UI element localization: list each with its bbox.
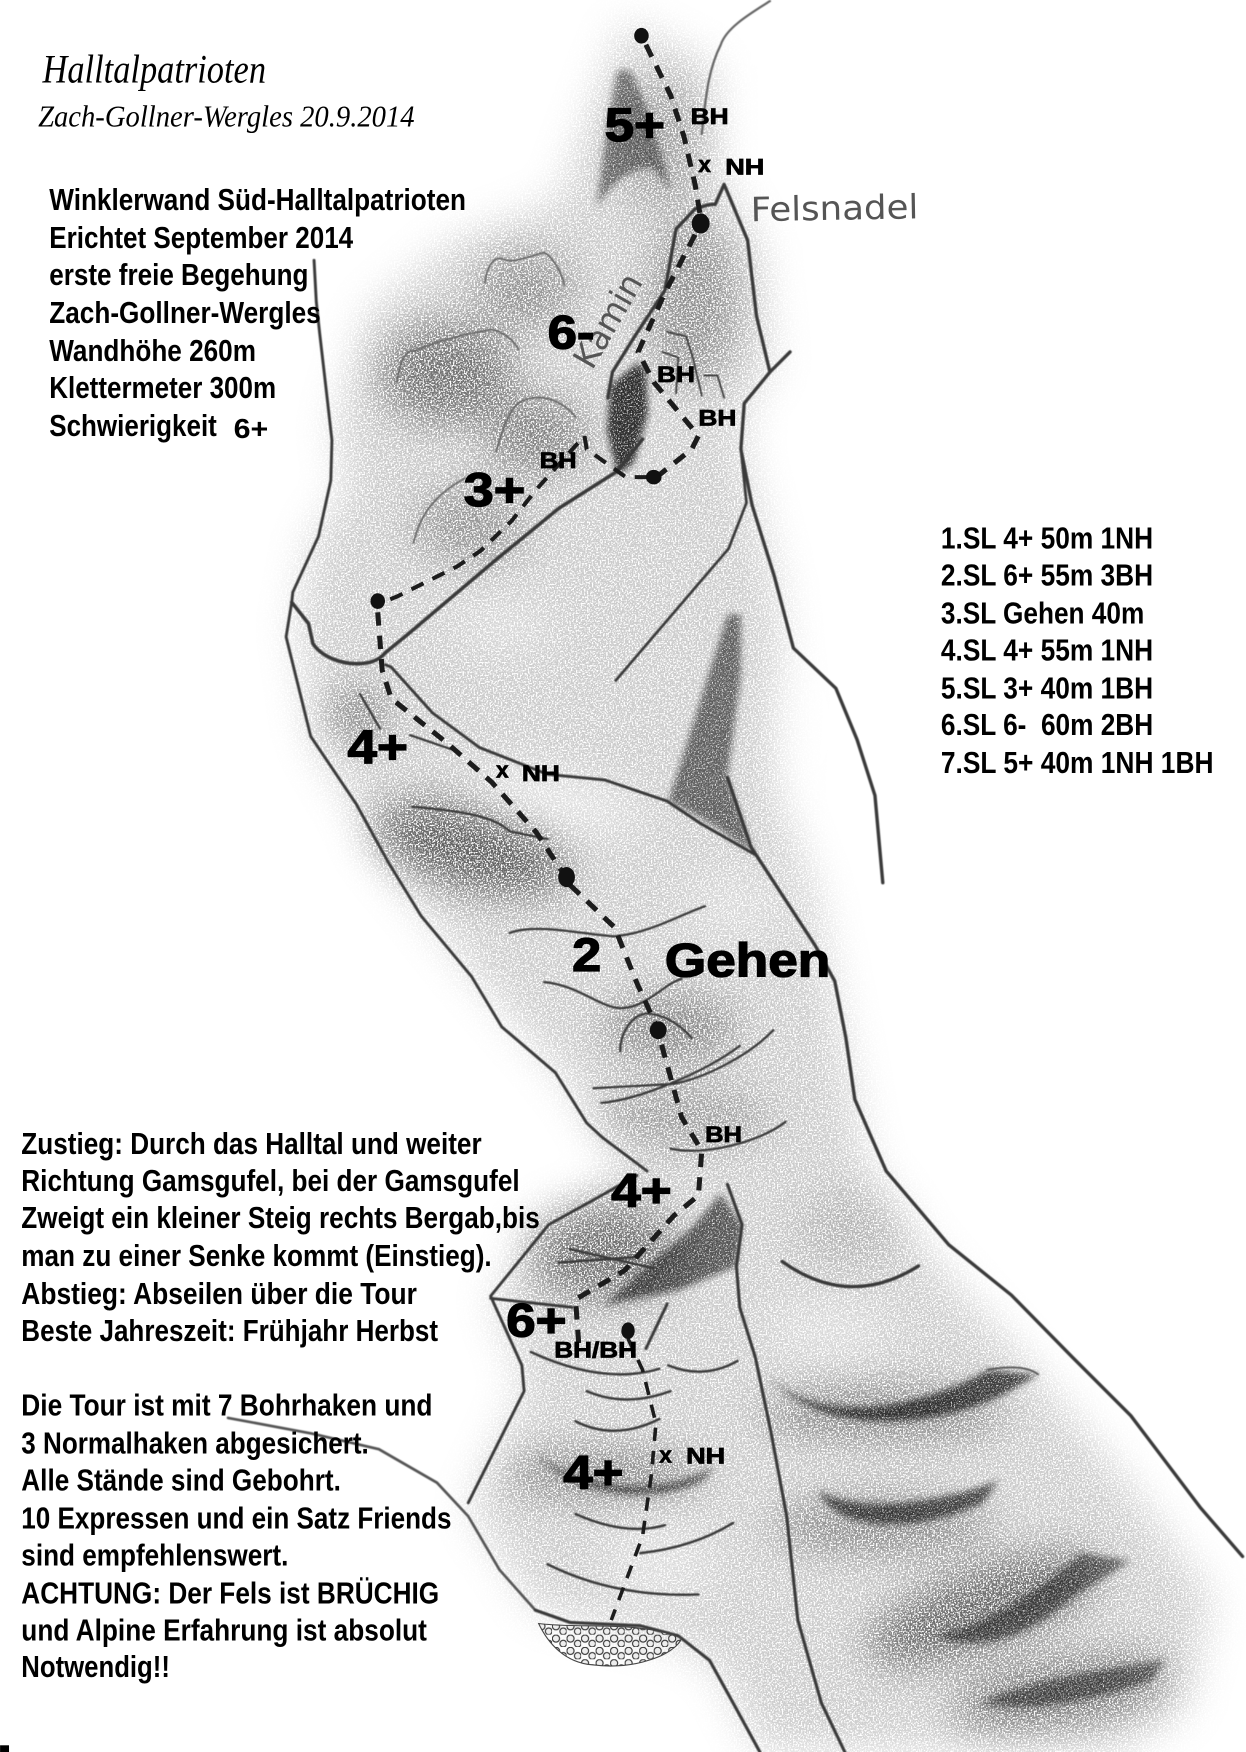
outline: lower spike edge <box>727 1184 845 1752</box>
panel: approach and notes: man zu einer Senke kommt (Einstieg). <box>21 1240 492 1273</box>
outline: diagonal traverse line <box>386 665 755 855</box>
panel: pitch list: 5.SL 3+ 40m 1BH <box>941 672 1153 705</box>
grade 4+ upper: 4+ <box>348 721 408 773</box>
panel: route facts: erste freie Begehung <box>49 259 308 292</box>
climbing route <box>370 28 710 1620</box>
bolt BH top: BH <box>691 104 729 129</box>
panel: approach and notes: Alle Stände sind Gebohrt. <box>21 1465 341 1498</box>
piton top: x <box>698 152 711 177</box>
panel: approach and notes: ACHTUNG: Der Fels ist BRÜCHIG <box>21 1577 439 1610</box>
outline: left bulge lower <box>468 1175 667 1503</box>
Gehen: Gehen <box>665 935 830 987</box>
grade 5+: 5+ <box>605 99 665 151</box>
bolt BH 4: BH <box>705 1122 742 1147</box>
outline: top right ridge <box>702 1 770 134</box>
grade 6-: 6- <box>548 307 595 359</box>
script title <box>38 47 415 133</box>
NH top: NH <box>725 154 764 179</box>
rock features: top crescent <box>782 1261 919 1287</box>
light highlights on the rock <box>447 598 894 1609</box>
panel: pitch list: 3.SL Gehen 40m <box>941 597 1144 630</box>
panel: route facts: 6+ <box>234 413 268 444</box>
grade 4+ middle: 4+ <box>611 1165 672 1217</box>
scree patch at route start <box>539 1624 682 1666</box>
panel: approach and notes: Zustieg: Durch das Halltal und weiter <box>21 1128 482 1161</box>
NH low: NH <box>686 1444 725 1469</box>
label: Kamin: Kamin <box>565 266 651 375</box>
double bolts: BH/BH <box>554 1338 637 1363</box>
rock features: lower ledges <box>531 1249 738 1595</box>
label: Felsnadel: Felsnadel <box>750 187 919 229</box>
outline: base right of scree <box>535 1610 760 1752</box>
bolt BH 3: BH <box>540 448 577 473</box>
outline: kamin gully <box>608 209 695 398</box>
route dashes <box>646 45 701 218</box>
panel: route facts: Winklerwand Süd-Halltalpatrioten <box>49 184 466 217</box>
bolt BH 1: BH <box>657 362 695 387</box>
corner scan mark <box>0 1745 9 1752</box>
NH mid: NH <box>522 761 560 786</box>
panel: pitch list <box>941 523 1214 780</box>
title: Halltalpatrioten: Halltalpatrioten <box>42 47 266 92</box>
outline: inner right crack <box>616 449 746 680</box>
panel: pitch list: 1.SL 4+ 50m 1NH <box>941 523 1153 556</box>
rock features: arcs <box>397 253 576 543</box>
grade 3+: 3+ <box>464 464 525 516</box>
subtitle: authors and date: Zach-Gollner-Wergles 20.9.2014 <box>38 99 415 133</box>
panel: approach and notes <box>21 1128 540 1684</box>
panel: approach and notes: Die Tour ist mit 7 Bohrhaken und <box>21 1390 432 1423</box>
pitch 2: 2 <box>572 929 601 981</box>
piton low: x <box>659 1443 672 1468</box>
panel: pitch list: 2.SL 6+ 55m 3BH <box>941 559 1153 592</box>
panel: approach and notes: 10 Expressen und ein Satz Friends <box>21 1503 451 1536</box>
panel: route facts: Wandhöhe 260m <box>49 335 256 368</box>
panel: approach and notes: Zweigt ein kleiner Steig rechts Bergab,bis <box>21 1202 540 1235</box>
graphite shading of the rock face <box>296 22 1212 1752</box>
dark shaded rock spikes and gully <box>534 70 1165 1707</box>
outline: thin hand line <box>228 1418 535 1610</box>
panel: route facts: Erichtet September 2014 <box>49 222 353 255</box>
panel: approach and notes: Richtung Gamsgufel, bei der Gamsgufel <box>21 1165 520 1198</box>
panel: approach and notes: Abstieg: Abseilen über die Tour <box>21 1278 417 1311</box>
panel: approach and notes: und Alpine Erfahrung ist absolut <box>21 1614 427 1647</box>
panel: approach and notes: sind empfehlenswert. <box>21 1539 288 1572</box>
panel: route facts: Schwierigkeit <box>49 410 217 443</box>
rock features: middle ledges <box>360 694 786 1151</box>
outline: long left wall upper <box>286 260 647 1171</box>
rock features: scribbles near BH <box>663 332 724 398</box>
panel: approach and notes: 3 Normalhaken abgesichert. <box>21 1428 369 1461</box>
route belay dots <box>370 28 710 1339</box>
panel: approach and notes: Beste Jahreszeit: Frühjahr Herbst <box>21 1315 438 1348</box>
outline: rock needle and right wall <box>695 184 883 883</box>
bolt BH 2: BH <box>698 406 736 431</box>
grade 4+ lower: 4+ <box>563 1446 624 1498</box>
panel: pitch list: 6.SL 6- 60m 2BH <box>941 709 1153 742</box>
handwritten labels <box>565 187 919 375</box>
piton mid: x <box>496 758 509 783</box>
panel: route facts: Klettermeter 300m <box>49 372 276 405</box>
grade 6+: 6+ <box>506 1294 567 1346</box>
outline: inner lower right wall <box>727 778 1243 1556</box>
panel: pitch list: 4.SL 4+ 55m 1NH <box>941 634 1153 667</box>
panel: pitch list: 7.SL 5+ 40m 1NH 1BH <box>941 747 1214 780</box>
outline: ledge and main ramp <box>292 439 643 664</box>
grade and protection labels on topo <box>348 99 830 1498</box>
panel: route facts: Zach-Gollner-Wergles <box>49 297 321 330</box>
panel: approach and notes: Notwendig!! <box>21 1651 170 1684</box>
panel: route facts <box>49 184 466 444</box>
